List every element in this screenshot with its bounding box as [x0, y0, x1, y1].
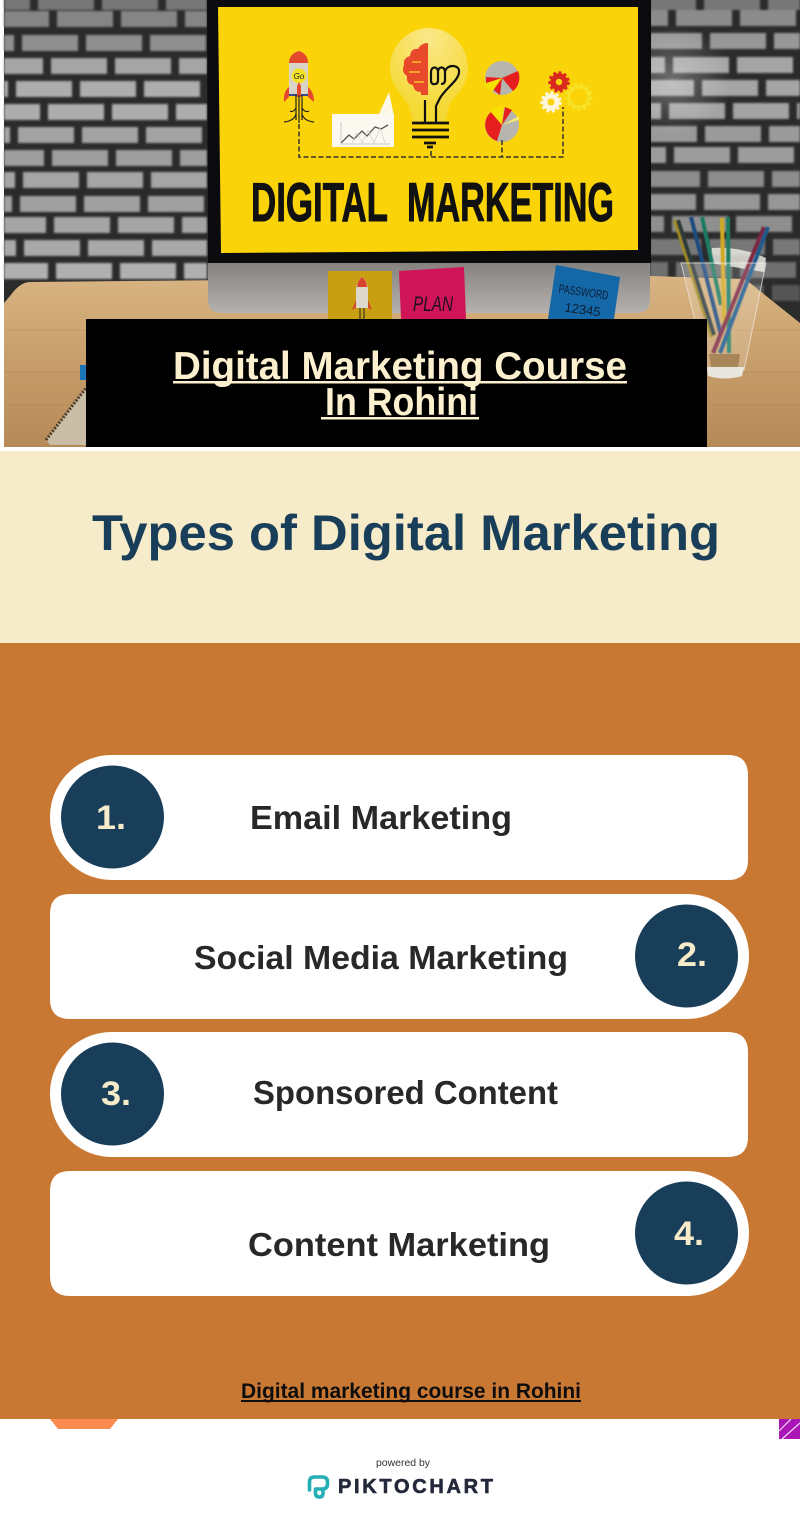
- powered by: powered by: [376, 1457, 431, 1469]
- title plate: Digital Marketing Course: [173, 345, 627, 388]
- icon: line chart card: [332, 92, 394, 147]
- sticky notes: 12345: [564, 300, 602, 319]
- footer link: Digital marketing course in Rohini: [241, 1380, 581, 1403]
- wooden desk: [4, 276, 800, 447]
- hero photo banner: [2, 0, 800, 447]
- Piktochart wordmark: PIKTOCHART: [338, 1476, 493, 1498]
- orange list panel: [0, 643, 800, 1419]
- icon: rocket: Go: [294, 72, 305, 81]
- screen heading: DIGITAL: [251, 171, 388, 233]
- list item 3: 3.: [101, 1075, 131, 1113]
- cream heading band: [0, 451, 800, 643]
- list item 4: [50, 1171, 749, 1296]
- list item 4: 4.: [674, 1215, 704, 1253]
- icon: light bulb with brain: [390, 28, 468, 147]
- title plate: In Rohini: [325, 381, 478, 424]
- list item 2: 2.: [677, 936, 707, 974]
- list item 3: Sponsored Content: [253, 1074, 558, 1111]
- list item 2: [50, 894, 749, 1019]
- pencil glass: [675, 217, 768, 378]
- screen heading: MARKETING: [407, 171, 614, 233]
- list item 2: Social Media Marketing: [194, 939, 568, 976]
- list item 1: [50, 755, 748, 880]
- notebook: [46, 365, 86, 445]
- list item 1: 1.: [96, 799, 126, 837]
- purple striped square: [779, 1419, 800, 1439]
- decorative clipped shapes and Piktochart branding: [50, 1419, 800, 1499]
- icon: pie charts: [483, 61, 519, 142]
- desktop monitor: [207, 0, 651, 319]
- brick wall right: [650, 2, 800, 293]
- sticky notes: PLAN: [413, 293, 453, 317]
- orange trapezoid: [50, 1419, 118, 1429]
- heading: Types of Digital Marketing: [92, 505, 720, 561]
- Piktochart logo icon: [310, 1477, 328, 1497]
- sticky notes: PASSWORD: [558, 282, 610, 302]
- screen heading: [251, 171, 614, 233]
- list item 4: Content Marketing: [248, 1226, 550, 1263]
- title plate: [86, 319, 707, 447]
- icon: gears: [542, 72, 592, 112]
- brick wall left: [4, 2, 207, 271]
- sticky notes: [328, 265, 620, 319]
- list item 3: [50, 1032, 748, 1157]
- dashed connector: [299, 107, 563, 157]
- list item 1: Email Marketing: [250, 799, 512, 836]
- icon: rocket: [284, 51, 314, 123]
